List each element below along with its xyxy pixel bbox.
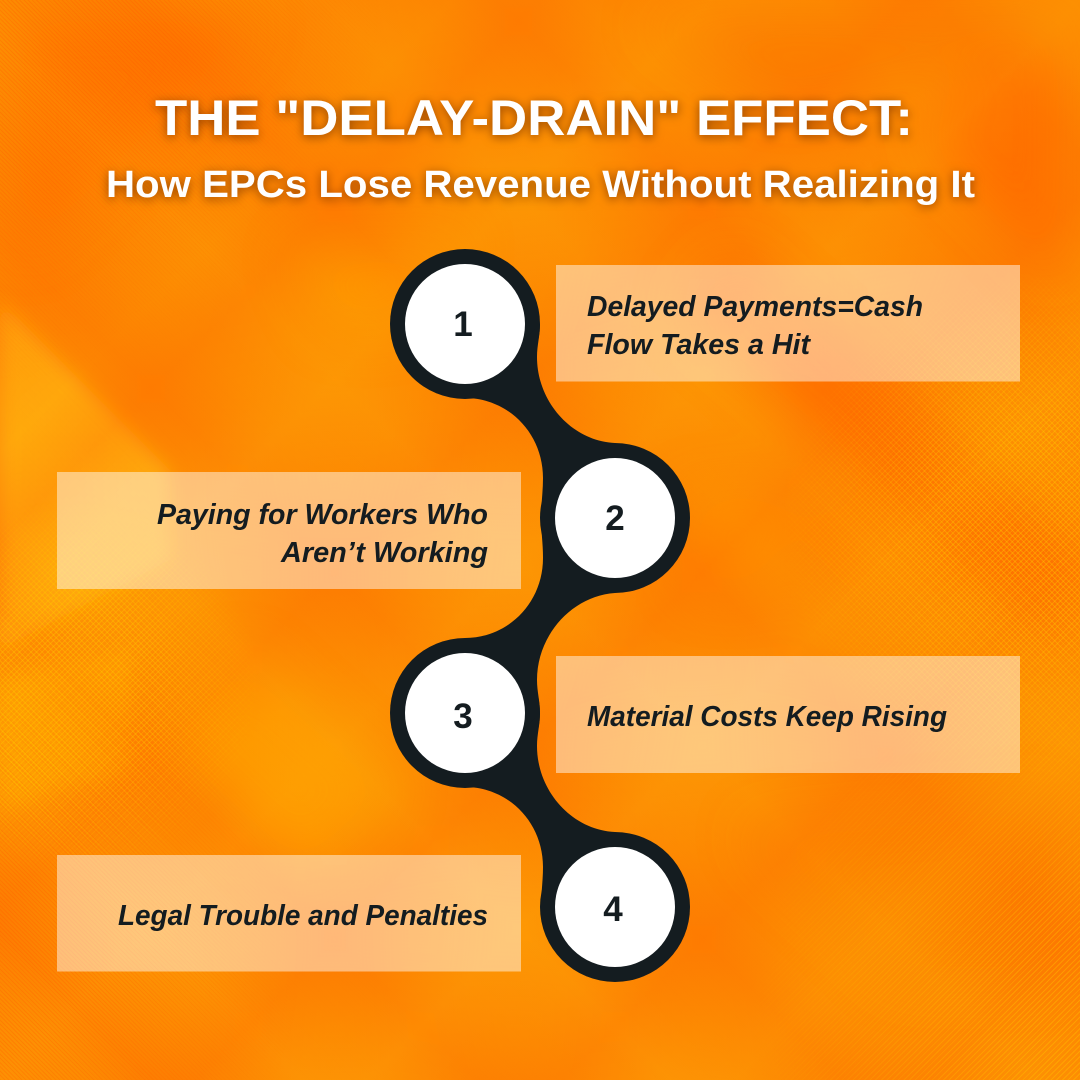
panel: material costs xyxy=(556,656,1020,773)
node 4: 4 xyxy=(603,890,623,929)
panel: idle workers: Aren’t Working xyxy=(280,537,488,569)
heading line 2: How EPCs Lose Revenue Without Realizing It xyxy=(106,164,975,206)
heading line 1: THE "DELAY-DRAIN" EFFECT: xyxy=(155,90,913,146)
panel: material costs: Material Costs Keep Rising xyxy=(587,701,947,733)
step 4 xyxy=(57,847,675,972)
node 4 xyxy=(555,847,675,967)
step 1 xyxy=(405,264,1020,384)
node 1 xyxy=(405,264,525,384)
panel: legal trouble xyxy=(57,855,521,972)
panel: delayed payments: Delayed Payments=Cash xyxy=(587,291,923,323)
panel: idle workers: Paying for Workers Who xyxy=(157,499,488,531)
panel: delayed payments xyxy=(556,265,1020,382)
title xyxy=(106,90,975,206)
panel: idle workers xyxy=(57,472,521,589)
panel: legal trouble: Legal Trouble and Penalties xyxy=(118,900,488,932)
node 2 xyxy=(555,458,675,578)
node 1: 1 xyxy=(453,305,473,344)
panel: delayed payments: Flow Takes a Hit xyxy=(587,329,811,361)
node 3 xyxy=(405,653,525,773)
step 3 xyxy=(405,653,1020,773)
connector: winding dark path linking the steps xyxy=(390,249,690,982)
node 2: 2 xyxy=(605,499,625,538)
node 3: 3 xyxy=(453,697,473,736)
step 2 xyxy=(57,458,675,589)
